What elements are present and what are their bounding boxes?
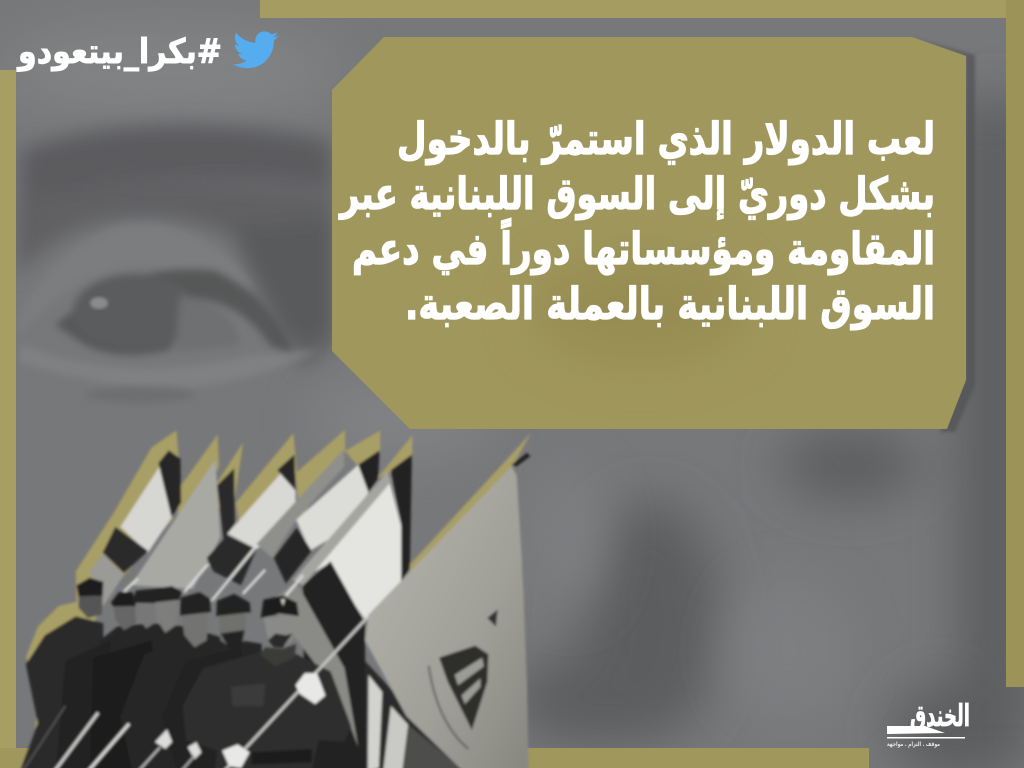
flag tip [511,453,530,466]
frame: left strip [0,70,16,768]
left eyebrow and socket [16,125,335,370]
hashtag: #بكرا_بيتعودو [16,32,222,72]
flag poles back [124,546,303,601]
soldier faces [76,578,251,651]
bottom crowd and white flag behind the big flag [365,661,475,768]
panel: quote box [332,37,975,432]
hands, gloves and poles [17,617,368,768]
right-side shadow of the face [510,100,1024,768]
logo: Al-Khandaq: الخندق [910,699,970,734]
quote text [338,114,935,330]
flag 7 [269,454,412,768]
big yellow flag [365,466,529,768]
logo: Al-Khandaq [887,699,970,748]
soldiers back row [17,616,262,768]
flag 4 [207,454,295,585]
flag 6 [274,450,380,584]
flag 3 [217,468,235,541]
photo: soldiers marching with flags [17,430,531,768]
flag 1 [90,450,181,606]
upper-left lighter forehead and lower-left cheek [0,20,490,460]
flag 5 [257,449,344,558]
logo tagline: موقف . التزام . مواجهة [887,741,940,748]
frame: top strip [260,0,1024,18]
flag 2 [131,460,220,589]
icon: twitter bird [233,31,279,68]
frame: bottom strip [0,748,869,768]
front soldier [183,596,351,768]
flags gold halo [26,430,531,768]
frame: right strip [1006,0,1024,687]
